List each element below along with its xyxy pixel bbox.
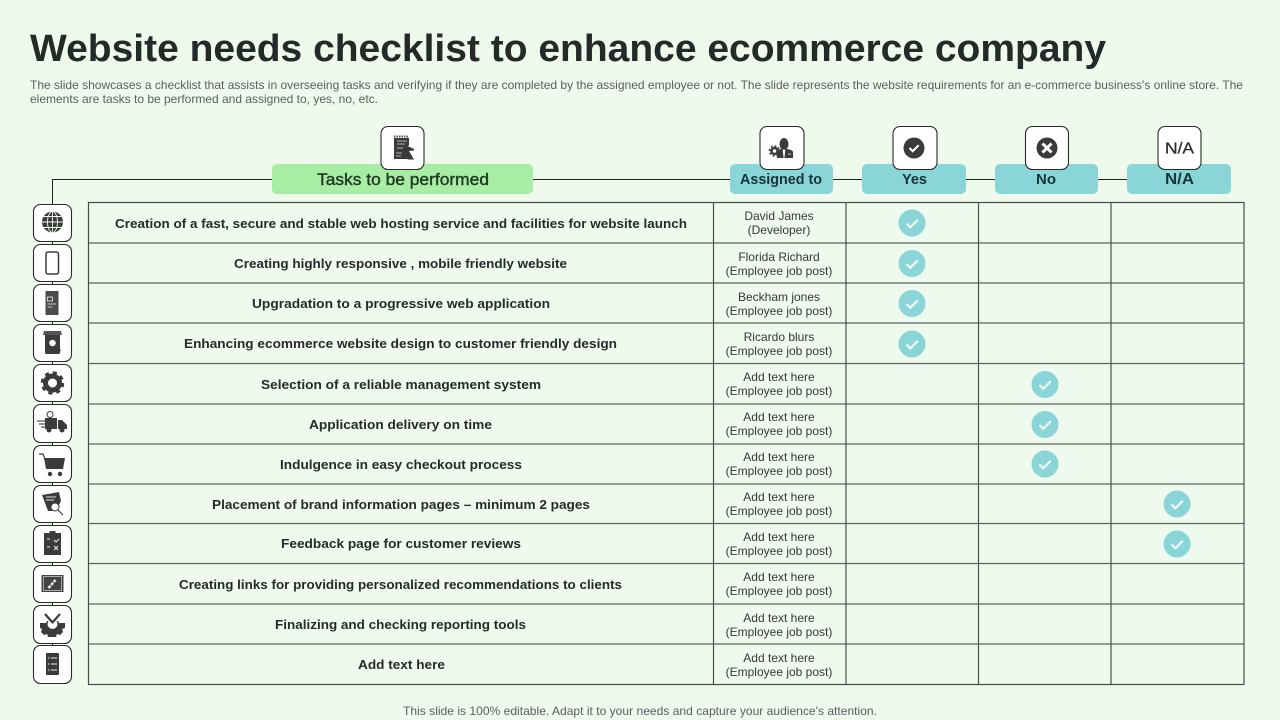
task names: Placement of brand information pages – minimum 2 pages (212, 497, 590, 512)
header: yes (862, 164, 966, 194)
assignees: Add text here (743, 370, 815, 384)
title: Website needs checklist to enhance ecommerce company (30, 28, 1106, 70)
assignees: Add text here (743, 570, 815, 584)
icon: check circle (893, 126, 937, 170)
header: tasks to be performed: Tasks to be performed (317, 170, 489, 189)
task names: Creation of a fast, secure and stable web hosting service and facilities for website launch (115, 216, 687, 231)
left icon: feedback clipboard (34, 526, 72, 562)
assignees: (Employee job post) (726, 665, 832, 679)
icon: N/A: N/A (1165, 140, 1194, 158)
header: N/A: N/A (1165, 171, 1194, 188)
assignees: (Employee job post) (726, 424, 832, 438)
assignees (726, 209, 832, 679)
assignees: (Employee job post) (726, 504, 832, 518)
icon: employee with gear (760, 126, 804, 170)
task names: Indulgence in easy checkout process (280, 457, 522, 472)
N/A check marks (1164, 490, 1190, 558)
left icon: gear (34, 364, 72, 402)
assignees: (Employee job post) (726, 344, 832, 358)
description text (30, 78, 1243, 106)
assignees: Add text here (743, 611, 815, 625)
assignees: Add text here (743, 651, 815, 665)
icon: task notepad (381, 126, 424, 170)
connector lines (52, 180, 1130, 647)
header: tasks to be performed (272, 164, 533, 194)
assignees: (Employee job post) (726, 304, 832, 318)
assignees: (Employee job post) (726, 264, 832, 278)
assignees: (Developer) (748, 223, 810, 237)
task names: Feedback page for customer reviews (281, 536, 521, 551)
task names (115, 216, 687, 672)
header: no: No (1036, 171, 1056, 188)
task names: Finalizing and checking reporting tools (275, 617, 526, 632)
task names: Application delivery on time (309, 417, 492, 432)
header: N/A (1127, 164, 1231, 194)
left icon: shopping cart (34, 446, 72, 482)
icon: N/A (1158, 126, 1201, 170)
assignees: (Employee job post) (726, 384, 832, 398)
header: assigned to: Assigned to (740, 171, 822, 188)
assignees: David James (744, 209, 814, 223)
header: no (995, 164, 1098, 194)
left icon: delivery truck (34, 404, 72, 442)
footer note: This slide is 100% editable. Adapt it to your needs and capture your audience's attention. (403, 704, 877, 718)
task names: Add text here (358, 657, 445, 672)
task names: Enhancing ecommerce website design to customer friendly design (184, 336, 617, 351)
assignees: Florida Richard (738, 250, 820, 264)
assignees: Beckham jones (738, 290, 820, 304)
task names: Selection of a reliable management system (261, 377, 541, 392)
left icon: online store (34, 324, 72, 362)
left icon: checklist (34, 646, 72, 684)
header: assigned to (730, 164, 833, 194)
icon: cross circle (1026, 126, 1068, 170)
assignees: Ricardo blurs (744, 330, 814, 344)
assignees: (Employee job post) (726, 464, 832, 478)
task names: Creating links for providing personalized recommendations to clients (179, 577, 622, 592)
assignees: Add text here (743, 410, 815, 424)
assignees: Add text here (743, 530, 815, 544)
left icon: globe (34, 204, 72, 242)
left icon: brand information pages (34, 486, 72, 522)
description text: elements are tasks to be performed and assigned to, yes, no, etc. (30, 92, 378, 106)
yes check marks (898, 210, 926, 358)
no check marks (1032, 371, 1058, 478)
assignees: (Employee job post) (726, 544, 832, 558)
left icon: tools and gear (34, 606, 72, 644)
assignees: Add text here (743, 450, 815, 464)
left icon: mobile phone (34, 244, 72, 282)
assignees: Add text here (743, 490, 815, 504)
description text: The slide showcases a checklist that assists in overseeing tasks and verifying if they are completed by the assigned employee or not. The slide represents the website requirements for an e-commerce business's online store. The (30, 78, 1243, 92)
task names: Upgradation to a progressive web application (252, 296, 550, 311)
task names: Creating highly responsive , mobile friendly website (234, 256, 567, 271)
assignees: (Employee job post) (726, 584, 832, 598)
assignees: (Employee job post) (726, 625, 832, 639)
left icon: links screen (34, 566, 72, 602)
checklist table (88, 202, 1244, 684)
header: yes: Yes (902, 171, 927, 188)
left icon: web application (34, 284, 72, 322)
